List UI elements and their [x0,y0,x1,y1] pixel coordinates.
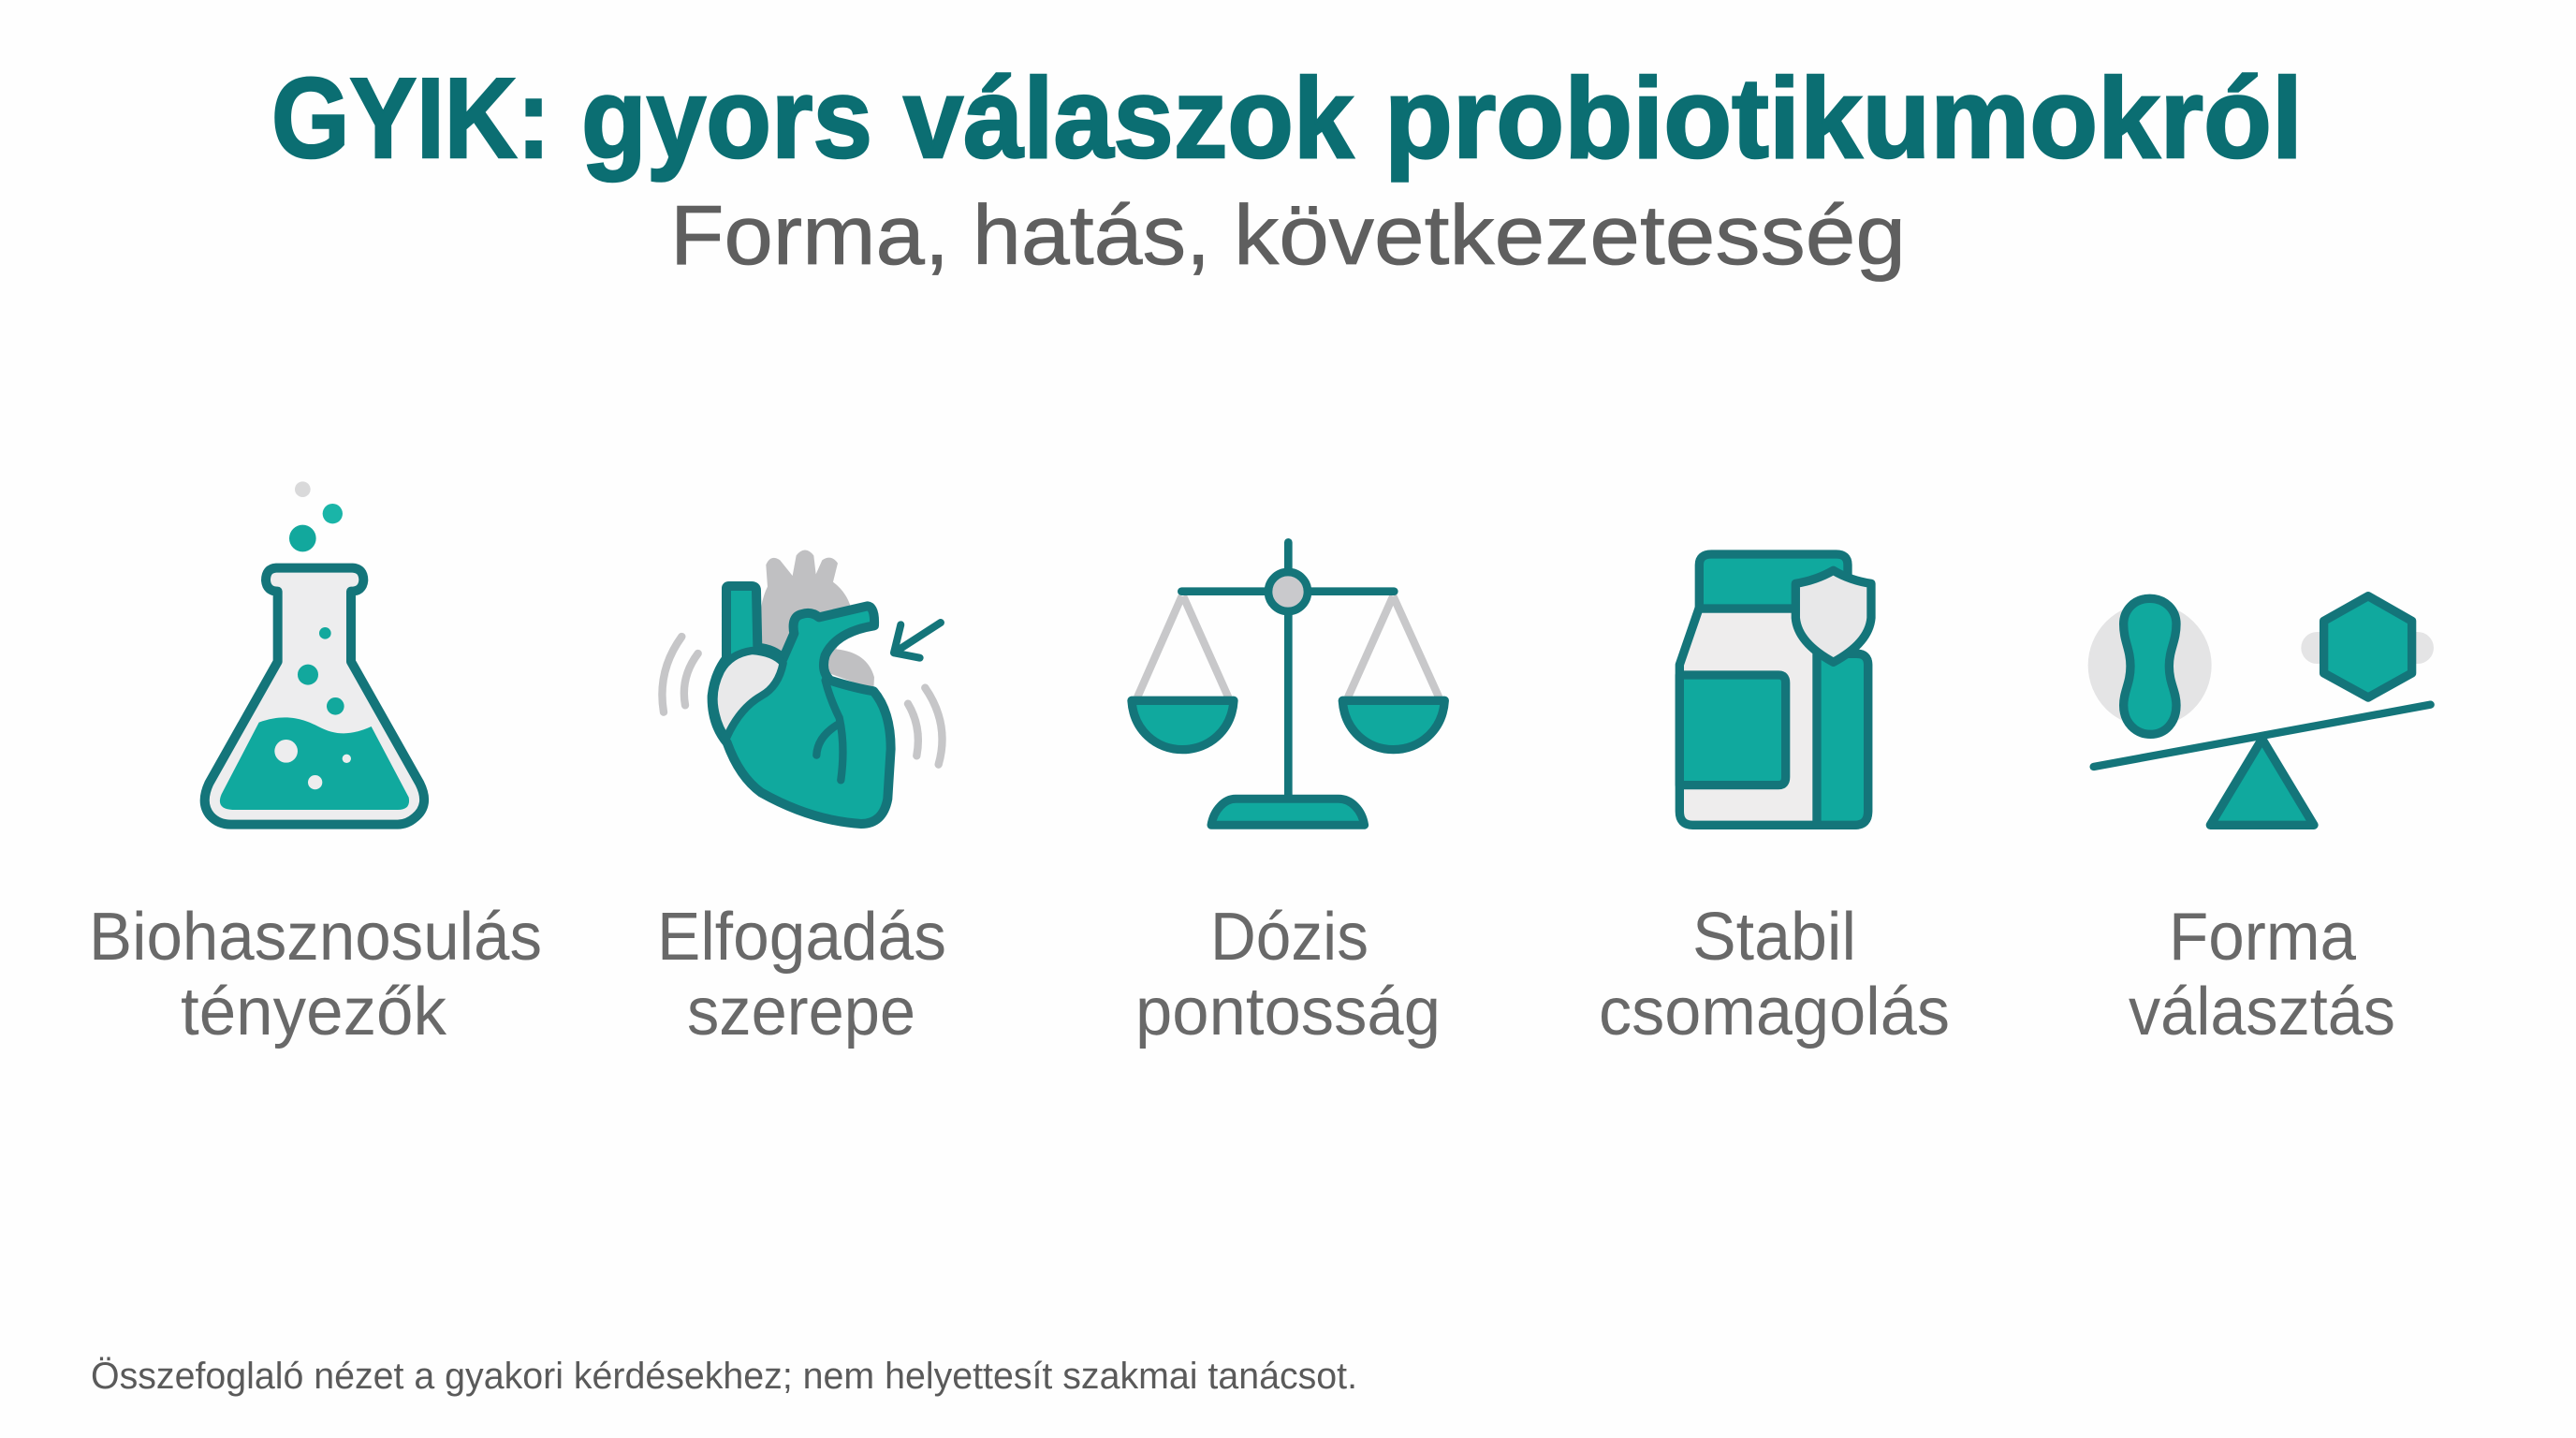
side panel [1817,653,1868,825]
motion lines [662,637,943,765]
flask liquid [220,717,409,810]
icon: balance scale [1132,542,1444,825]
title: GYIK: [271,54,550,182]
footer note: Összefoglaló nézet a gyakori kérdésekhez; nem helyettesít szakmai tanácsot. [91,1356,1357,1397]
grey circle [2088,604,2212,727]
title: válaszok [903,54,1354,182]
label: Forma választás: választás [2129,975,2395,1049]
seesaw beam [2094,705,2431,767]
icon: flask [205,481,424,825]
bottle cap [1699,554,1848,609]
bubbles [274,481,351,789]
icon: seesaw with capsule and tablet [2088,596,2434,825]
label: Biohasznosulás tényezők [89,900,542,1049]
heart left chamber [713,651,783,738]
label: Dózis pontosság: pontosság [1135,975,1441,1049]
icon: heart [662,550,943,824]
label: Biohasznosulás tényezők: tényezők [181,975,447,1049]
subtitle: következetesség [1234,189,1906,283]
title: probiotikumokról [1384,54,2303,182]
label: Stabil csomagolás [1599,900,1950,1049]
grey pill [2301,632,2434,664]
title: gyors [581,54,872,182]
icon: bottle with shield [1679,554,1871,825]
label: Forma választás [2129,900,2395,1049]
subtitle: Forma, [670,189,949,283]
scale post and beam [1181,542,1394,799]
label: Biohasznosulás tényezők: Biohasznosulás [89,900,542,975]
fulcrum [2210,739,2314,825]
right pan [1342,700,1444,750]
label: Elfogadás szerepe: Elfogadás [657,900,946,975]
capsule [2124,598,2176,734]
label: Elfogadás szerepe [657,900,946,1049]
left pan [1132,700,1234,750]
arrow [894,623,941,658]
label [1679,675,1786,785]
label: Dózis pontosság: Dózis [1210,900,1368,975]
grey heart behind [760,550,874,690]
scale strings [1137,596,1439,697]
heart main [712,586,891,824]
base [1211,799,1365,825]
pivot [1268,572,1308,611]
label: Stabil csomagolás: Stabil [1692,900,1856,975]
flask body [205,568,424,825]
shield [1795,570,1871,662]
hexagon tablet [2324,596,2412,697]
bottle body [1679,609,1868,825]
subtitle [670,189,1906,283]
label: Stabil csomagolás: csomagolás [1599,975,1950,1049]
label: Dózis pontosság [1135,900,1441,1049]
label: Elfogadás szerepe: szerepe [687,975,915,1049]
title [271,54,2303,182]
heart vessels [816,681,842,780]
label: Forma választás: Forma [2169,900,2357,975]
subtitle: hatás, [973,189,1210,283]
